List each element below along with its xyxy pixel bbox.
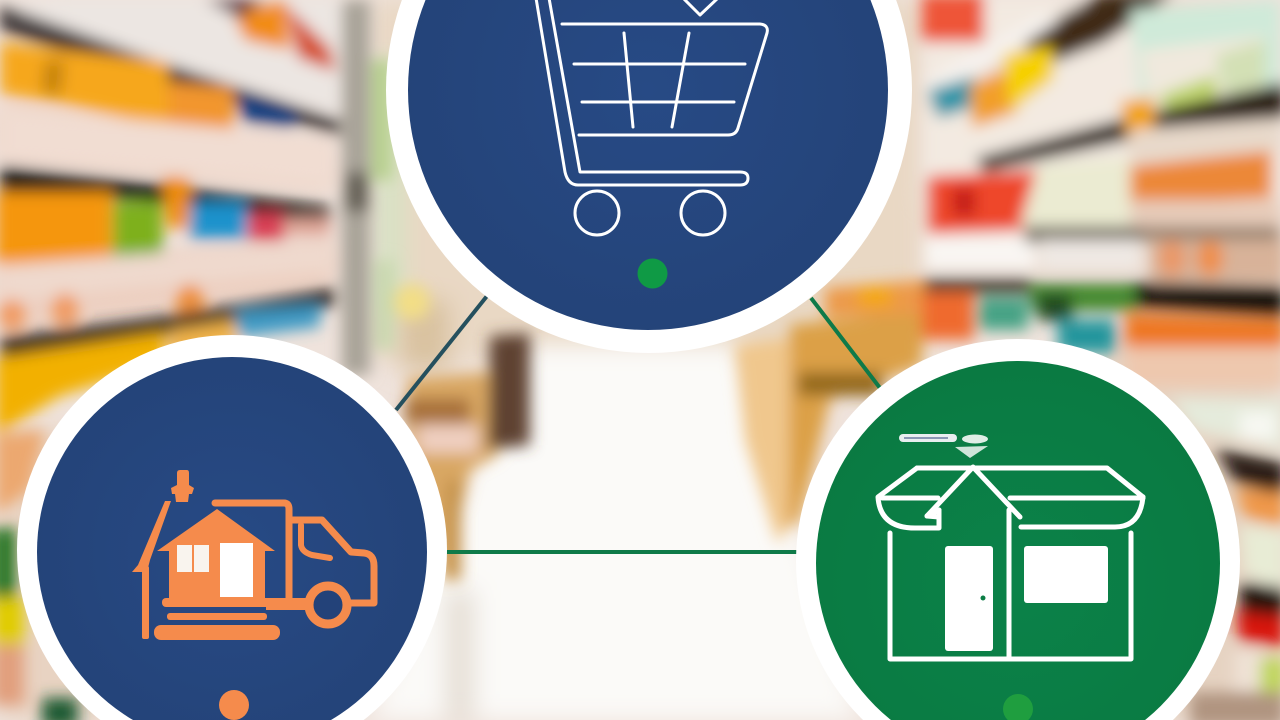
centre-left items xyxy=(394,284,430,320)
node: storefront xyxy=(796,339,1240,720)
store window xyxy=(1024,546,1108,603)
truck wheel xyxy=(309,586,347,624)
centre-right items xyxy=(735,338,790,545)
orange status dot xyxy=(219,690,249,720)
small pen mark xyxy=(899,434,988,458)
icon: store box xyxy=(878,434,1143,659)
house window xyxy=(177,545,209,572)
house door xyxy=(220,543,253,597)
node: delivery truck and home xyxy=(17,335,447,720)
icon: shopping cart xyxy=(536,0,767,235)
connector: top to left xyxy=(396,296,487,410)
right shelves top xyxy=(925,0,1280,240)
node: shopping cart xyxy=(386,0,912,353)
mid band xyxy=(925,238,1035,270)
store door xyxy=(945,546,993,651)
left shelves xyxy=(0,0,340,115)
lower band xyxy=(1130,282,1280,318)
green status dot xyxy=(1003,694,1033,720)
icon: house with truck xyxy=(132,470,374,640)
connector: top to right xyxy=(811,298,880,388)
green status dot xyxy=(638,258,668,288)
pillar xyxy=(342,0,370,375)
connector: left to right xyxy=(447,550,798,554)
